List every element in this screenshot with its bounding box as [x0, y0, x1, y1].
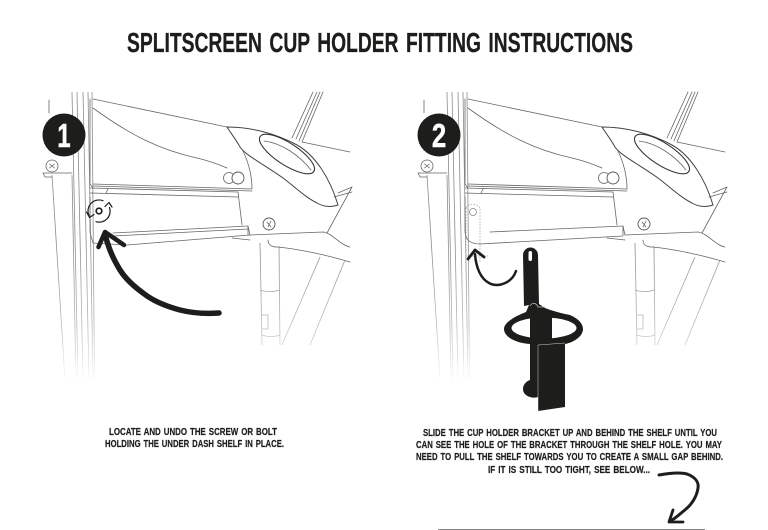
number badge 2: 2	[432, 118, 446, 155]
icon: rotate screw	[86, 200, 112, 222]
text: step 2 instructions	[416, 428, 723, 476]
arrow: curved up to shelf	[468, 250, 516, 285]
text: step 2 instructions: IF IT IS STILL TOO TIGHT, SEE BELOW...	[488, 465, 650, 476]
text: step 1 instructions: HOLDING THE UNDER DASH SHELF IN PLACE.	[105, 439, 284, 450]
text: step 1 instructions: LOCATE AND UNDO THE SCREW OR BOLT	[109, 427, 278, 438]
dashboard line drawing, step 2	[418, 92, 727, 380]
arrow: curved to screw	[98, 232, 219, 313]
number badge 1	[42, 114, 86, 156]
panel: step 2	[416, 92, 727, 530]
number badge 1: 1	[57, 118, 71, 155]
divider rule	[438, 528, 705, 530]
text: step 1 instructions	[105, 427, 284, 450]
dashboard line drawing, step 1	[43, 92, 352, 380]
number badge 2	[418, 114, 460, 156]
panel: step 1	[42, 92, 352, 450]
arrow: see below	[659, 473, 698, 522]
cup holder bracket	[504, 248, 583, 411]
